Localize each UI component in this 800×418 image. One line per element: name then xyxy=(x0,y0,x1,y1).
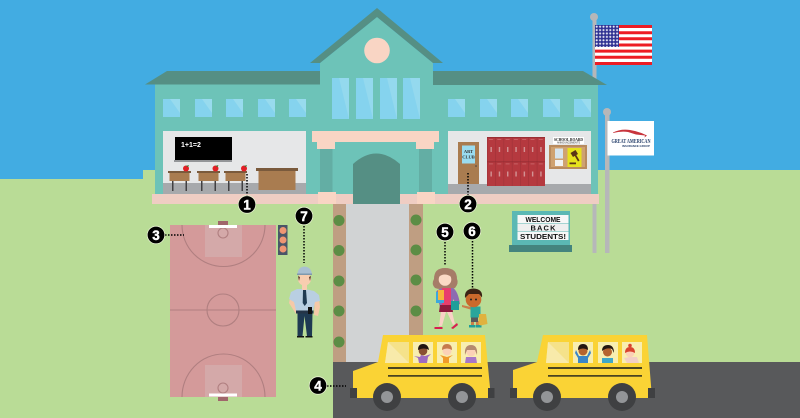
welcome sign xyxy=(509,211,572,252)
traffic signal xyxy=(278,225,288,255)
road xyxy=(333,362,800,418)
bus body xyxy=(353,335,491,398)
bus wheels xyxy=(533,383,636,411)
children in windows xyxy=(575,344,639,363)
Great American logo flag: INSURANCE GROUP xyxy=(622,144,650,148)
Great American logo flag: GREAT AMERICAN xyxy=(612,138,651,145)
panel: hallway xyxy=(448,131,591,194)
marker 6 xyxy=(463,222,481,288)
front door arch xyxy=(353,154,400,204)
chalkboard: 1+1=2 xyxy=(181,142,201,149)
classroom door xyxy=(458,142,479,184)
teacher xyxy=(433,268,460,329)
marker 5 xyxy=(436,223,454,265)
crossing guard officer xyxy=(289,266,320,338)
gable round window xyxy=(364,38,390,63)
welcome sign: STUDENTS! xyxy=(520,232,566,241)
left wing windows xyxy=(163,99,306,117)
bus windows xyxy=(385,342,481,363)
chalkboard xyxy=(174,137,232,162)
icon: gavel xyxy=(570,150,580,164)
right roof xyxy=(433,71,607,85)
marker 1: 1 xyxy=(243,197,251,212)
wing walls xyxy=(155,84,598,196)
marker 3 xyxy=(147,226,184,244)
walkway xyxy=(333,204,423,362)
walkway shrubs xyxy=(334,214,422,348)
bus stripes xyxy=(388,367,482,377)
Great American logo flag xyxy=(608,121,654,156)
American flag xyxy=(595,25,652,65)
bus body xyxy=(513,335,652,398)
school bus 2 xyxy=(510,335,655,411)
marker 1 xyxy=(238,174,256,213)
bulletin board xyxy=(549,145,587,169)
left roof xyxy=(145,71,320,84)
central gable roof xyxy=(310,8,443,63)
classroom door: ART xyxy=(464,149,473,154)
child with backpack xyxy=(462,288,488,328)
flagpole: American flag xyxy=(590,13,652,253)
school building xyxy=(145,8,607,204)
marker 5: 5 xyxy=(441,225,449,240)
marker 4 xyxy=(309,377,346,394)
school board heading: SCHOOL BOARD xyxy=(554,138,583,142)
school bus 1 xyxy=(350,335,494,411)
bus wheels xyxy=(373,383,476,411)
marker 6: 6 xyxy=(468,224,476,239)
school board heading xyxy=(553,137,584,145)
marker 7 xyxy=(295,207,313,263)
central windows xyxy=(332,78,420,119)
lockers xyxy=(487,137,545,186)
sidewalk xyxy=(152,194,599,204)
children in windows xyxy=(414,344,477,363)
panel: classroom xyxy=(163,131,306,194)
welcome sign: WELCOME xyxy=(526,215,560,224)
marker 7: 7 xyxy=(300,209,308,224)
classroom door: CLUB xyxy=(462,154,475,160)
welcome sign: BACK xyxy=(530,223,556,232)
lawn xyxy=(0,170,800,418)
marker 2 xyxy=(459,173,477,213)
teacher desk xyxy=(256,168,298,190)
apples xyxy=(183,165,247,172)
school board heading: ANNOUNCEMENTS xyxy=(557,142,580,145)
right wing windows xyxy=(448,99,591,117)
central block xyxy=(320,17,433,204)
bus stripes xyxy=(548,367,642,377)
marker 2: 2 xyxy=(464,197,472,212)
basketball court xyxy=(170,221,276,401)
small flagpole with company flag xyxy=(603,108,654,253)
marker 4: 4 xyxy=(314,378,322,393)
marker 3: 3 xyxy=(152,228,160,243)
student desks xyxy=(168,171,247,191)
bus windows xyxy=(546,342,642,363)
portico xyxy=(312,131,439,204)
